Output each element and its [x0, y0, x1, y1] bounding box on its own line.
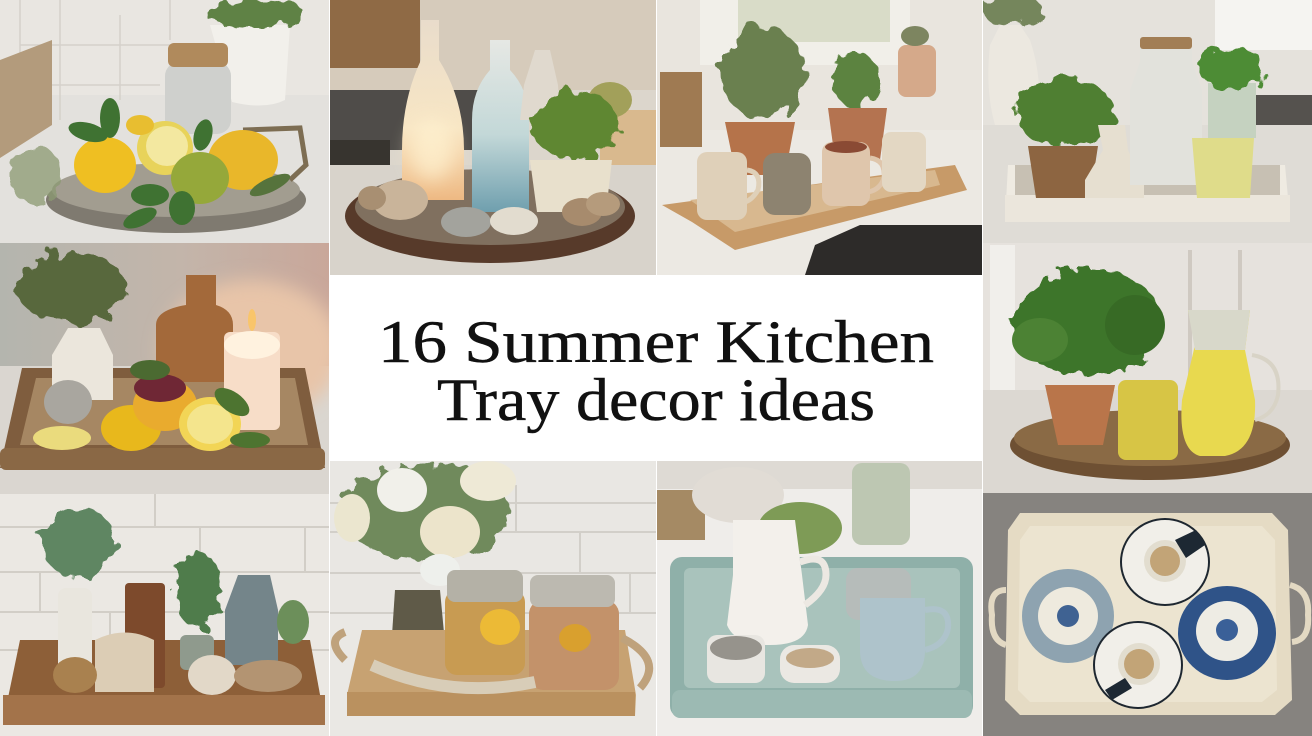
- mugs: [697, 132, 926, 220]
- glass bottle: [1130, 155, 1196, 185]
- panel: lemon tray photo: [0, 0, 329, 243]
- lemons: [74, 115, 278, 204]
- white pitcher: [727, 520, 808, 645]
- vase: [52, 328, 113, 400]
- panel: wooden crate tray photo: [0, 494, 329, 736]
- jug: [1085, 125, 1144, 198]
- panel: mugs on wooden tray photo: [657, 0, 982, 275]
- candle: [224, 309, 280, 430]
- panel: basil pot on wooden round photo: [983, 243, 1312, 493]
- herb sprig: [9, 145, 61, 205]
- teal tray: [670, 557, 973, 718]
- title: Tray decor ideas: [437, 367, 875, 433]
- panel: tray with candle and lemons photo: [0, 243, 342, 494]
- cream tray: [1005, 513, 1292, 715]
- panel: candle bottles and shells tray photo: [330, 0, 656, 275]
- fruit: [33, 360, 270, 451]
- leaves: [66, 98, 293, 233]
- shells: [358, 180, 620, 237]
- tray: [46, 190, 306, 233]
- mugs and bowls: [707, 568, 948, 683]
- round tray: [345, 169, 635, 263]
- panel: flowers and glass jars tray photo: [330, 461, 656, 736]
- tray: [1006, 165, 1288, 195]
- plates: [1022, 519, 1276, 708]
- herb: [17, 252, 127, 324]
- cutting board: [156, 275, 233, 382]
- bottles: [402, 20, 560, 212]
- flowers: [334, 461, 516, 630]
- wood tray: [0, 368, 325, 468]
- basil plant: [1012, 268, 1165, 445]
- crate: [8, 640, 320, 695]
- wooden tray: [662, 165, 967, 250]
- potted herb: [530, 91, 619, 212]
- tray: [347, 630, 636, 716]
- panel: teal tray with white pitcher and mugs photo: [657, 461, 982, 736]
- objects: [53, 552, 309, 695]
- jars: [372, 570, 619, 690]
- juice glasses: [1192, 46, 1265, 198]
- panel: white tray with basil and juice photo: [982, 0, 1312, 243]
- panel: cream tray with blue plates photo: [983, 493, 1312, 736]
- title: 16 Summer Kitchen: [378, 309, 934, 375]
- round board: [1010, 410, 1290, 480]
- basil pot: [1014, 78, 1114, 198]
- pitcher: [1118, 310, 1278, 460]
- herb plants in terracotta: [720, 26, 936, 175]
- eucalyptus: [42, 506, 114, 578]
